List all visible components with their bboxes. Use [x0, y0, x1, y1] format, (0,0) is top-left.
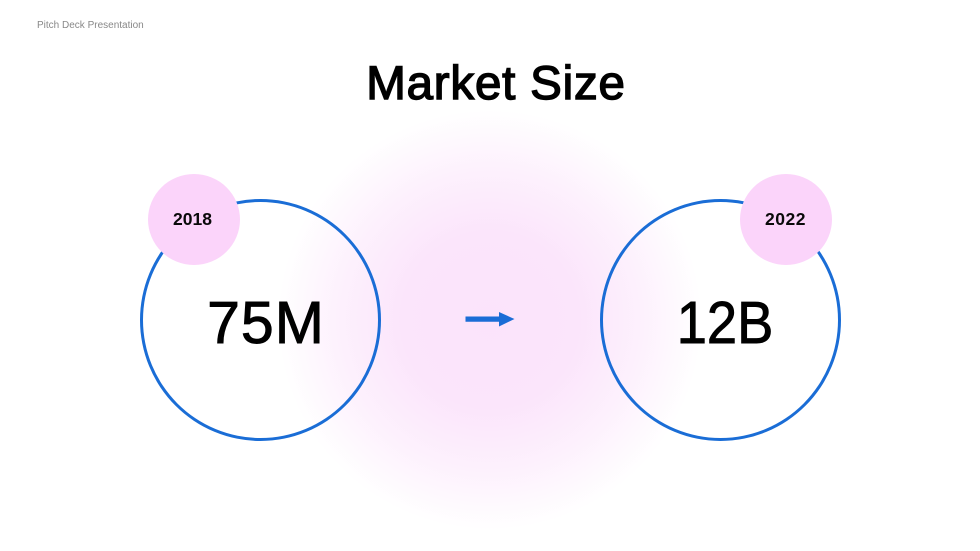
badge: 2018: 2018	[173, 209, 212, 229]
badge: 2022: 2022	[765, 209, 806, 229]
circle: 2022	[600, 199, 841, 441]
title: Market Size	[366, 57, 626, 110]
badge: 2022	[740, 174, 832, 265]
value: 75M: 75M	[207, 290, 325, 356]
background glow	[278, 110, 702, 530]
badge: 2018	[148, 174, 240, 265]
arrow	[466, 312, 514, 326]
header label: Pitch Deck Presentation	[37, 20, 144, 31]
circle: 2018	[140, 199, 381, 441]
value: 12B: 12B	[677, 290, 773, 356]
